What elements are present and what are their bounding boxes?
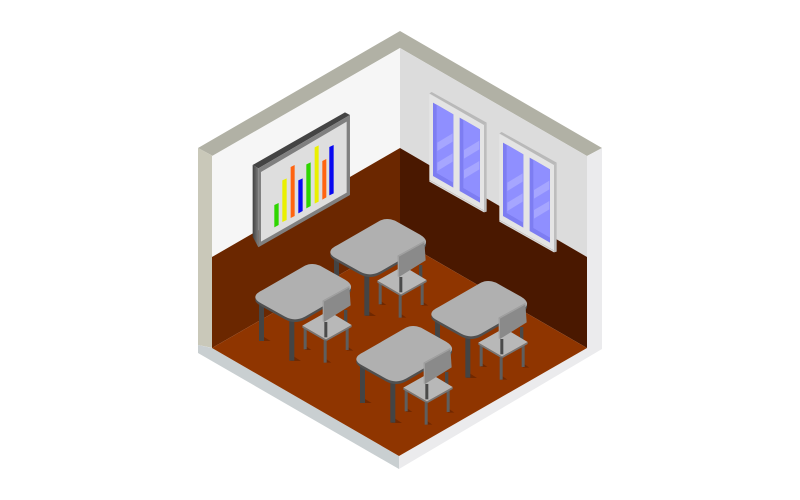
window 1 bbox=[429, 92, 487, 212]
floor bbox=[212, 240, 587, 456]
right wall end and floor side bbox=[399, 148, 602, 469]
panel: room shell bbox=[198, 31, 602, 469]
right wall lower bbox=[400, 148, 587, 348]
desk and chair: back bbox=[330, 219, 428, 318]
right wall upper bbox=[400, 48, 587, 257]
window 2 bbox=[499, 132, 557, 252]
bar chart bbox=[274, 145, 334, 227]
left floor side bbox=[198, 345, 399, 469]
left wall lower bbox=[212, 148, 400, 348]
desk and chair: front bbox=[356, 326, 454, 425]
wall top rim bbox=[198, 31, 602, 156]
left wall upper bbox=[212, 48, 400, 257]
left wall end bbox=[198, 148, 213, 348]
chart board on wall bbox=[253, 112, 350, 247]
desk and chair: left bbox=[255, 264, 353, 363]
desk and chair: right bbox=[431, 281, 529, 380]
